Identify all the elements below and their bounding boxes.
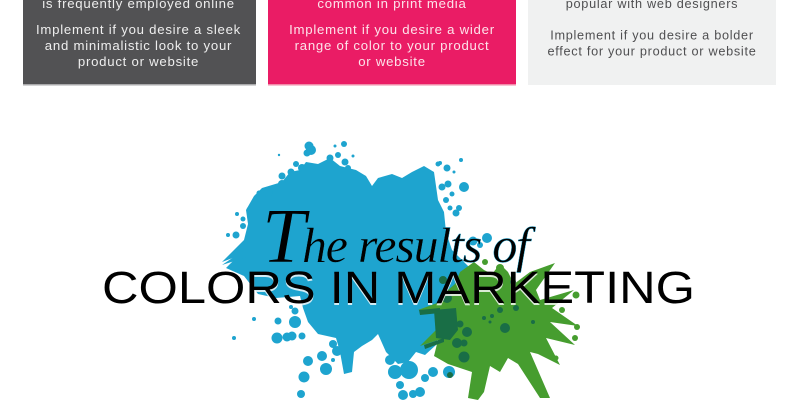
panel: black and white card bbox=[23, 0, 256, 86]
heading: script line: T bbox=[262, 192, 310, 279]
text: light card copy bbox=[547, 0, 757, 58]
text: light card copy: effect for your product or website bbox=[547, 44, 757, 58]
text: black and white card copy: Implement if you desire a sleek bbox=[36, 22, 241, 37]
heading: main title: COLORS IN MARKETING bbox=[102, 264, 695, 315]
illustration: green paint splatter bbox=[418, 259, 580, 400]
text: pink card copy: Implement if you desire a wider bbox=[289, 22, 495, 37]
heading: script line bbox=[262, 192, 536, 279]
panel: pink card bbox=[268, 0, 516, 86]
text: pink card copy: or website bbox=[358, 54, 426, 69]
text: pink card copy: range of color to your product bbox=[295, 38, 489, 53]
text: black and white card copy bbox=[36, 0, 241, 69]
text: black and white card copy: and minimalistic look to your bbox=[45, 38, 232, 53]
text: black and white card copy: product or website bbox=[78, 54, 199, 69]
heading: main title: COLORS IN MARKETING bbox=[102, 262, 695, 313]
illustration: blue paint splatter bbox=[222, 141, 492, 400]
text: light card copy: Implement if you desire a bolder bbox=[550, 28, 754, 42]
panel: light grey card bbox=[528, 0, 776, 85]
heading: script line: he results of bbox=[302, 217, 536, 273]
text: pink card copy bbox=[289, 0, 495, 69]
illustration: dark green overlap spots bbox=[419, 276, 535, 378]
